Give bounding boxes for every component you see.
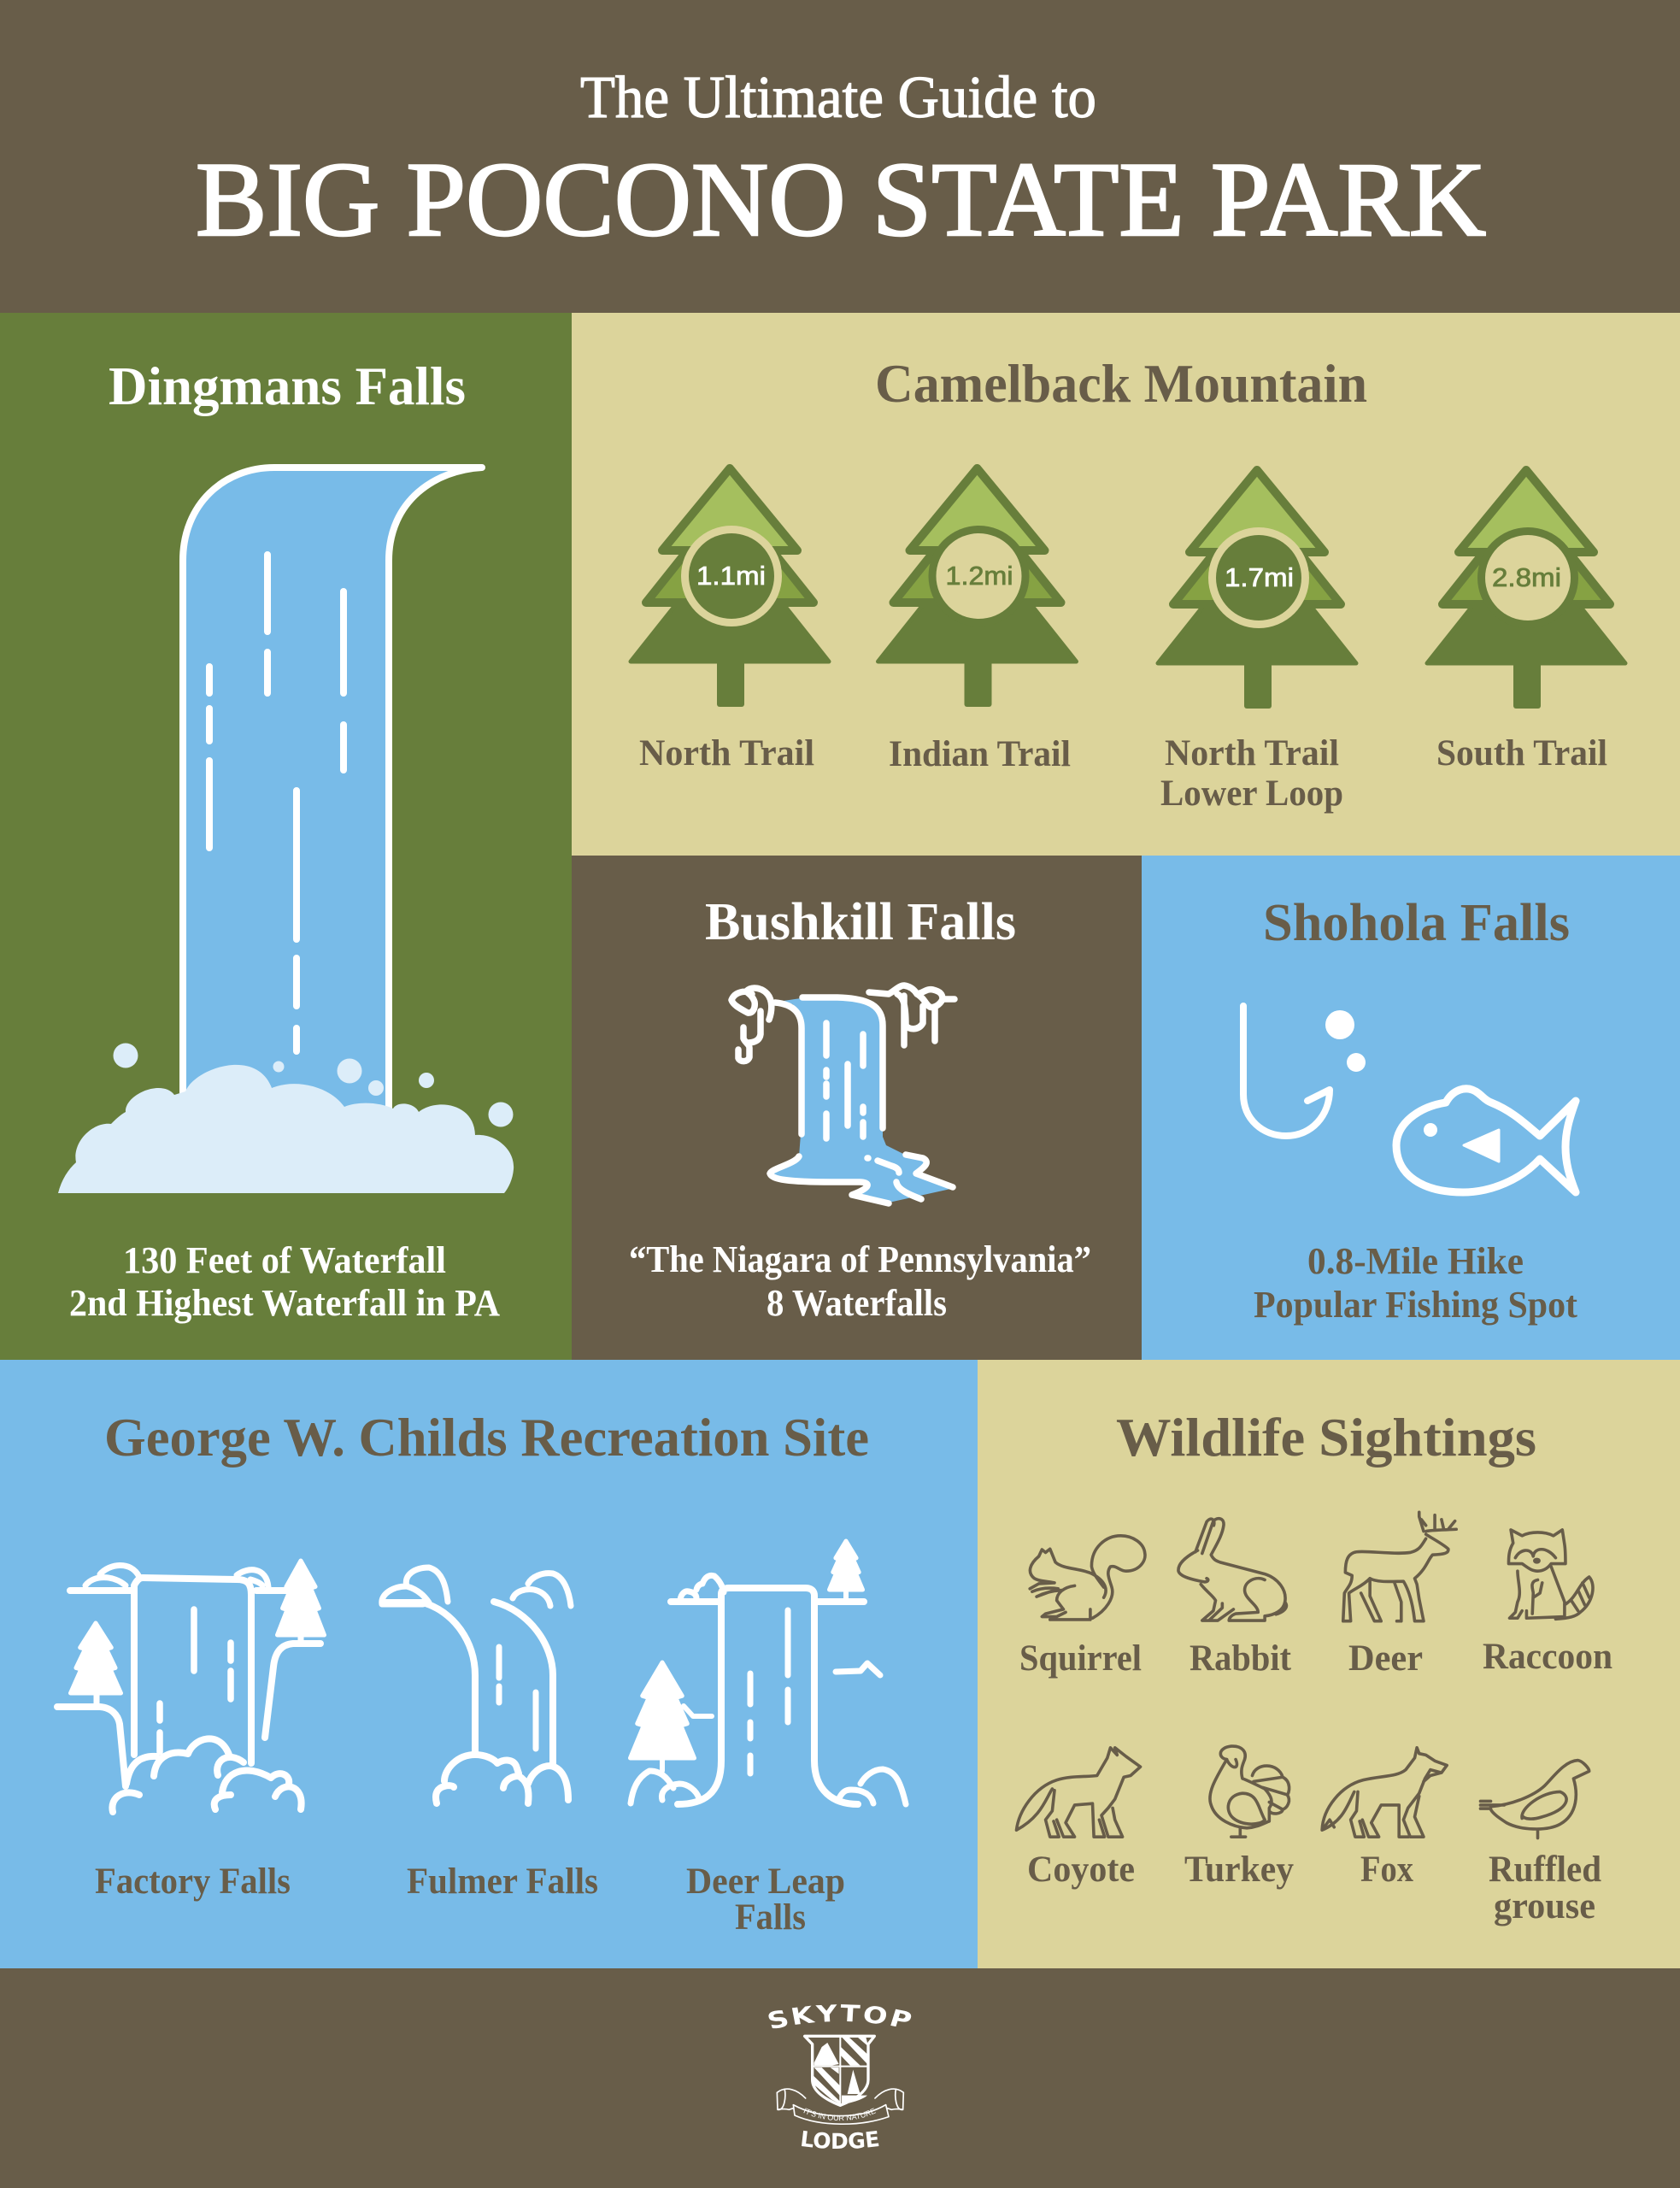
caption: 8 Waterfalls: 8 Waterfalls <box>767 1282 947 1324</box>
caption: The Niagara of Pennsylvania: “The Niagara of Pennsylvania” <box>629 1238 1091 1280</box>
caption: 2nd highest: 2nd Highest Waterfall in PA <box>69 1282 500 1324</box>
panel: Bushkill Falls <box>572 856 1142 1360</box>
icon: rabbit <box>1178 1519 1286 1620</box>
icon: coyote <box>1017 1748 1141 1837</box>
tree: Indian Trail 1.2mi <box>878 468 1077 707</box>
icon: ruffled grouse <box>1480 1761 1589 1838</box>
heading: Camelback Mountain: Camelback Mountain <box>875 353 1367 414</box>
caption: Popular Fishing Spot: Popular Fishing Spot <box>1254 1284 1577 1326</box>
panel: Shohola Falls <box>1142 856 1680 1360</box>
tree right <box>277 1561 325 1635</box>
panel: Wildlife Sightings <box>978 1360 1680 1968</box>
icon: fish hook and bubbles <box>1243 1006 1366 1136</box>
label: Squirrel: Squirrel <box>1019 1638 1142 1679</box>
label: Ruffled grouse <box>1489 1850 1601 1926</box>
tree: North Trail 1.1mi: 1.1mi <box>696 561 766 591</box>
tree left <box>631 1662 694 1758</box>
caption: 0.8-Mile Hike: 0.8-Mile Hike <box>1307 1240 1524 1282</box>
icon: large waterfall <box>58 468 514 1193</box>
label: Fox: Fox <box>1360 1850 1413 1890</box>
foam cloud <box>58 1065 514 1193</box>
tree top right <box>829 1541 863 1590</box>
label: North Trail Lower Loop: Lower Loop <box>1160 773 1343 814</box>
icon: turkey <box>1210 1746 1289 1837</box>
label: Coyote: Coyote <box>1027 1850 1135 1890</box>
label: Ruffled grouse: grouse <box>1494 1886 1595 1926</box>
label: Raccoon: Raccoon <box>1483 1637 1612 1677</box>
shield crest <box>805 2036 874 2105</box>
heading: Bushkill Falls: Bushkill Falls <box>705 893 1016 951</box>
label: Indian Trail: Indian Trail <box>889 734 1071 774</box>
motto ribbon <box>777 2089 903 2124</box>
label: North Trail Lower Loop <box>1160 733 1343 814</box>
label: North Trail: North Trail <box>639 733 814 773</box>
icon: fox <box>1322 1748 1447 1837</box>
heading: Shohola Falls: Shohola Falls <box>1263 894 1570 952</box>
panel: George W. Childs Recreation Site <box>0 1360 978 1968</box>
label: Deer Leap Falls <box>686 1862 845 1938</box>
logo: Skytop Lodge: SKYTOP <box>768 2004 911 2029</box>
icon: Bushkill waterfall <box>731 985 955 1203</box>
label: Deer Leap Falls: Deer Leap <box>686 1862 845 1902</box>
icon: Deer Leap Falls <box>631 1541 906 1804</box>
icon: Fulmer Falls <box>382 1567 571 1803</box>
title line: The Ultimate Guide to: The Ultimate Guide to <box>580 65 1096 131</box>
footer panel <box>768 2004 911 2149</box>
header panel <box>0 0 1680 313</box>
tree: Indian Trail 1.2mi: 1.2mi <box>945 561 1013 591</box>
label: Deer Leap Falls: Falls <box>735 1897 806 1938</box>
tree: South Trail 2.8mi: 2.8mi <box>1492 562 1561 592</box>
panel: Camelback Mountain <box>572 313 1680 856</box>
logo word: Lodge: LODGE <box>802 2130 878 2149</box>
icon: deer <box>1343 1512 1456 1621</box>
caption: 130 feet: 130 Feet of Waterfall <box>123 1239 446 1281</box>
label: Fulmer Falls: Fulmer Falls <box>407 1862 598 1902</box>
logo: Skytop Lodge <box>768 2004 911 2149</box>
icon: Factory Falls <box>57 1561 325 1812</box>
icon: fish <box>1396 1089 1576 1192</box>
label: South Trail: South Trail <box>1436 733 1607 773</box>
tree: North Trail Lower Loop 1.7mi <box>1158 470 1356 709</box>
icon: squirrel <box>1030 1536 1145 1620</box>
icon: raccoon <box>1508 1530 1593 1619</box>
tree left <box>70 1623 121 1693</box>
panel: Dingmans Falls <box>0 313 572 1360</box>
heading: George W. Childs Recreation Site: George W. Childs Recreation Site <box>104 1407 869 1467</box>
heading: Dingmans Falls: Dingmans Falls <box>109 356 466 416</box>
tree: North Trail 1.1mi <box>631 468 829 707</box>
label: Rabbit: Rabbit <box>1190 1638 1292 1679</box>
label: Ruffled grouse: Ruffled <box>1489 1850 1601 1890</box>
label: Factory Falls: Factory Falls <box>95 1862 291 1902</box>
title line: Big Pocono State Park: BIG POCONO STATE PARK <box>196 141 1486 258</box>
motto text: IT'S IN OUR NATURE <box>803 2108 877 2121</box>
tree: North Trail Lower Loop 1.7mi: 1.7mi <box>1225 562 1294 592</box>
label: Deer: Deer <box>1348 1638 1423 1679</box>
label: Turkey: Turkey <box>1184 1850 1294 1890</box>
label: North Trail Lower Loop: North Trail <box>1165 733 1339 773</box>
tree: South Trail 2.8mi <box>1427 470 1625 709</box>
heading: Wildlife Sightings: Wildlife Sightings <box>1116 1407 1536 1467</box>
